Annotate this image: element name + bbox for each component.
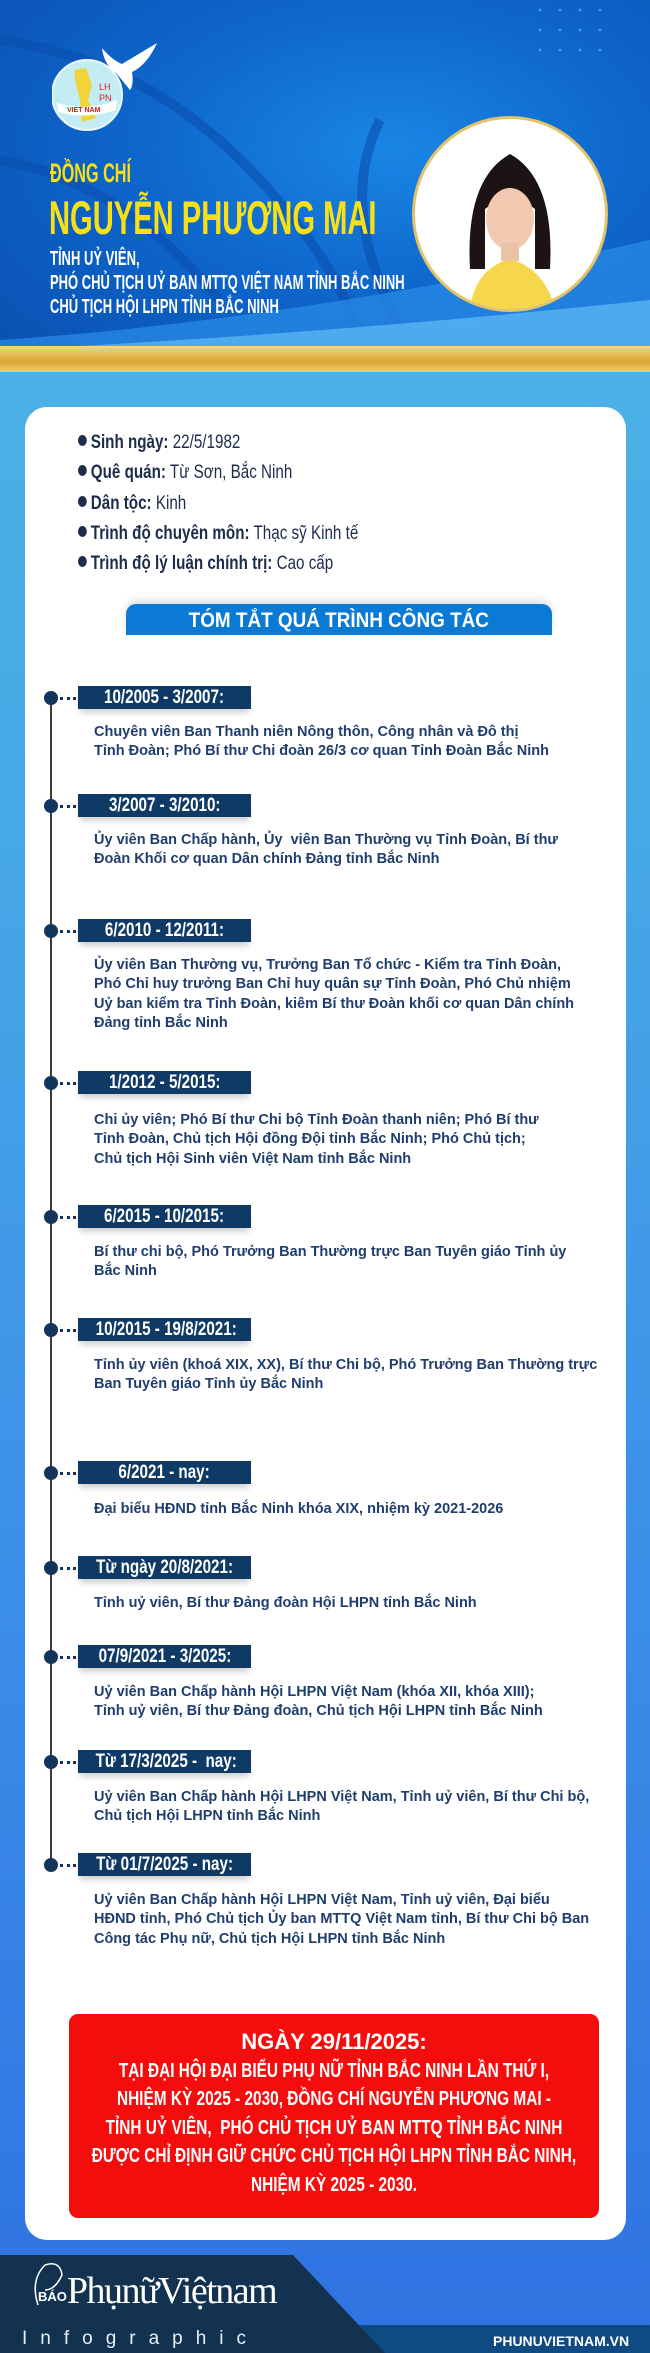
- subtitle: TỈNH UỶ VIÊN,: [50, 248, 140, 270]
- timeline item 5: Bí thư chi bộ, Phó Trưởng Ban Thường trực Ban Tuyên giáo Tỉnh ủy: [94, 1244, 566, 1260]
- timeline item 4: [44, 1071, 539, 1167]
- subtitle: CHỦ TỊCH HỘI LHPN TỈNH BẮC NINH: [50, 296, 279, 318]
- timeline item 6: Tỉnh ủy viên (khoá XIX, XX), Bí thư Chi bộ, Phó Trưởng Ban Thường trực: [94, 1357, 597, 1373]
- timeline item 10: [44, 1750, 589, 1824]
- timeline item 8: Tỉnh uỷ viên, Bí thư Đảng đoàn Hội LHPN tỉnh Bắc Ninh: [94, 1595, 477, 1611]
- callout: red announcement: NHIỆM KỲ 2025 - 2030.: [251, 2174, 417, 2196]
- photo portrait: [412, 116, 608, 312]
- section title bar: TÓM TẮT QUÁ TRÌNH CÔNG TÁC: [189, 609, 489, 632]
- personal info list: [78, 432, 358, 574]
- timeline item 5: Bắc Ninh: [94, 1263, 157, 1279]
- header banner: [0, 0, 650, 372]
- timeline item 9: Tỉnh uỷ viên, Bí thư Đảng đoàn, Chủ tịch Hội LHPN tỉnh Bắc Ninh: [94, 1703, 543, 1719]
- timeline item 10: Từ 17/3/2025 - nay:: [96, 1751, 237, 1772]
- icon: LHPN logo: PN: [99, 93, 112, 103]
- callout: red announcement: TẠI ĐẠI HỘI ĐẠI BIỂU PHỤ NỮ TỈNH BẮC NINH LẦN THỨ I,: [119, 2060, 549, 2082]
- personal info list: Trình độ lý luận chính trị: Cao cấp: [91, 553, 333, 574]
- personal info list: Trình độ chuyên môn: Thạc sỹ Kinh tế: [91, 523, 358, 544]
- timeline item 2: 3/2007 - 3/2010:: [109, 795, 220, 816]
- callout: red announcement: NGÀY 29/11/2025:: [241, 2029, 427, 2054]
- callout: red announcement: NHIỆM KỲ 2025 - 2030, ĐỒNG CHÍ NGUYỄN PHƯƠNG MAI -: [117, 2088, 551, 2110]
- subtitle: PHÓ CHỦ TỊCH UỶ BAN MTTQ VIỆT NAM TỈNH BẮC NINH: [50, 272, 405, 294]
- personal info list: Sinh ngày: 22/5/1982: [91, 432, 240, 453]
- timeline item 4: Chi ủy viên; Phó Bí thư Chi bộ Tỉnh Đoàn thanh niên; Phó Bí thư: [94, 1112, 539, 1128]
- timeline item 2: Ủy viên Ban Chấp hành, Ủy viên Ban Thường vụ Tỉnh Đoàn, Bí thư: [94, 832, 558, 848]
- timeline item 10: Uỷ viên Ban Chấp hành Hội LHPN Việt Nam, Tỉnh uỷ viên, Bí thư Chi bộ,: [94, 1789, 589, 1805]
- icon: LHPN logo: LH: [99, 82, 111, 92]
- heading: Đồng chí: ĐỒNG CHÍ: [50, 158, 131, 188]
- personal info list: Dân tộc: Kinh: [91, 493, 186, 514]
- timeline item 4: 1/2012 - 5/2015:: [109, 1072, 220, 1093]
- timeline item 6: Ban Tuyên giáo Tỉnh ủy Bắc Ninh: [94, 1376, 323, 1392]
- timeline item 11: Công tác Phụ nữ, Chủ tịch Hội LHPN tỉnh Bắc Ninh: [94, 1931, 445, 1947]
- timeline item 5: [44, 1205, 566, 1279]
- timeline item 5: 6/2015 - 10/2015:: [104, 1206, 224, 1227]
- timeline item 1: Tỉnh Đoàn; Phó Bí thư Chi đoàn 26/3 cơ quan Tỉnh Đoàn Bắc Ninh: [94, 742, 549, 758]
- timeline item 7: [44, 1461, 503, 1517]
- timeline item 6: [44, 1318, 597, 1392]
- timeline item 2: [44, 794, 558, 866]
- timeline item 11: Từ 01/7/2025 - nay:: [96, 1854, 233, 1875]
- timeline: [50, 704, 52, 1858]
- timeline item 4: Chủ tịch Hội Sinh viên Việt Nam tỉnh Bắc Ninh: [94, 1151, 411, 1167]
- timeline item 3: Phó Chỉ huy trưởng Ban Chỉ huy quân sự Tỉnh Đoàn, Phó Chủ nhiệm: [94, 976, 571, 992]
- timeline item 6: 10/2015 - 19/8/2021:: [96, 1319, 237, 1340]
- footer label: Infographic: Infographic: [22, 2328, 259, 2349]
- timeline item 7: Đại biểu HĐND tỉnh Bắc Ninh khóa XIX, nhiệm kỳ 2021-2026: [94, 1501, 503, 1517]
- timeline item 3: Ủy viên Ban Thường vụ, Trưởng Ban Tổ chức - Kiểm tra Tỉnh Đoàn,: [94, 957, 561, 973]
- heading: name: NGUYỄN PHƯƠNG MAI: [49, 191, 377, 244]
- footer website: PHUNUVIETNAM.VN: [493, 2333, 629, 2349]
- timeline item 3: Đảng tỉnh Bắc Ninh: [94, 1015, 228, 1031]
- timeline item 1: [44, 686, 549, 758]
- timeline item 11: HĐND tỉnh, Phó Chủ tịch Ủy ban MTTQ Việt Nam tỉnh, Bí thư Chi bộ Ban: [94, 1911, 589, 1927]
- footer: [0, 2255, 650, 2353]
- panel: info card: [25, 407, 626, 2240]
- callout: red announcement: TỈNH UỶ VIÊN, PHÓ CHỦ TỊCH UỶ BAN MTTQ TỈNH BẮC NINH: [106, 2117, 562, 2139]
- personal info list: Quê quán: Từ Sơn, Bắc Ninh: [91, 462, 292, 483]
- timeline item 2: Đoàn Khối cơ quan Dân chính Đảng tỉnh Bắc Ninh: [94, 850, 439, 866]
- timeline item 8: [44, 1556, 477, 1611]
- timeline item 11: [44, 1853, 589, 1947]
- timeline item 10: Chủ tịch Hội LHPN tỉnh Bắc Ninh: [94, 1808, 320, 1824]
- timeline item 11: Uỷ viên Ban Chấp hành Hội LHPN Việt Nam, Tỉnh uỷ viên, Đại biểu: [94, 1892, 550, 1908]
- timeline item 3: 6/2010 - 12/2011:: [105, 920, 224, 941]
- timeline item 7: 6/2021 - nay:: [119, 1462, 210, 1483]
- callout: red announcement: ĐƯỢC CHỈ ĐỊNH GIỮ CHỨC CHỦ TỊCH HỘI LHPN TỈNH BẮC NINH,: [92, 2145, 576, 2167]
- timeline item 8: Từ ngày 20/8/2021:: [96, 1557, 233, 1578]
- timeline item 9: Uỷ viên Ban Chấp hành Hội LHPN Việt Nam (khóa XII, khóa XIII);: [94, 1684, 534, 1700]
- timeline item 9: 07/9/2021 - 3/2025:: [98, 1646, 231, 1667]
- section title bar: [126, 604, 552, 635]
- timeline item 3: Uỷ ban kiểm tra Tỉnh Đoàn, kiêm Bí thư Đoàn khối cơ quan Dân chính: [94, 996, 574, 1012]
- icon: LHPN logo: [52, 43, 157, 131]
- timeline item 9: [44, 1645, 543, 1719]
- footer logo: Báo Phụ nữ Việt Nam: BÁOPhụnữViệtnam: [38, 2270, 276, 2312]
- callout: red announcement: [69, 2014, 599, 2218]
- timeline item 3: [44, 919, 574, 1031]
- icon: LHPN logo: VIET NAM: [67, 107, 101, 114]
- subtitle: [50, 246, 405, 318]
- timeline item 1: 10/2005 - 3/2007:: [104, 687, 224, 708]
- timeline item 1: Chuyên viên Ban Thanh niên Nông thôn, Công nhân và Đô thị: [94, 724, 519, 740]
- timeline item 4: Tỉnh Đoàn, Chủ tịch Hội đồng Đội tỉnh Bắc Ninh; Phó Chủ tịch;: [94, 1131, 526, 1147]
